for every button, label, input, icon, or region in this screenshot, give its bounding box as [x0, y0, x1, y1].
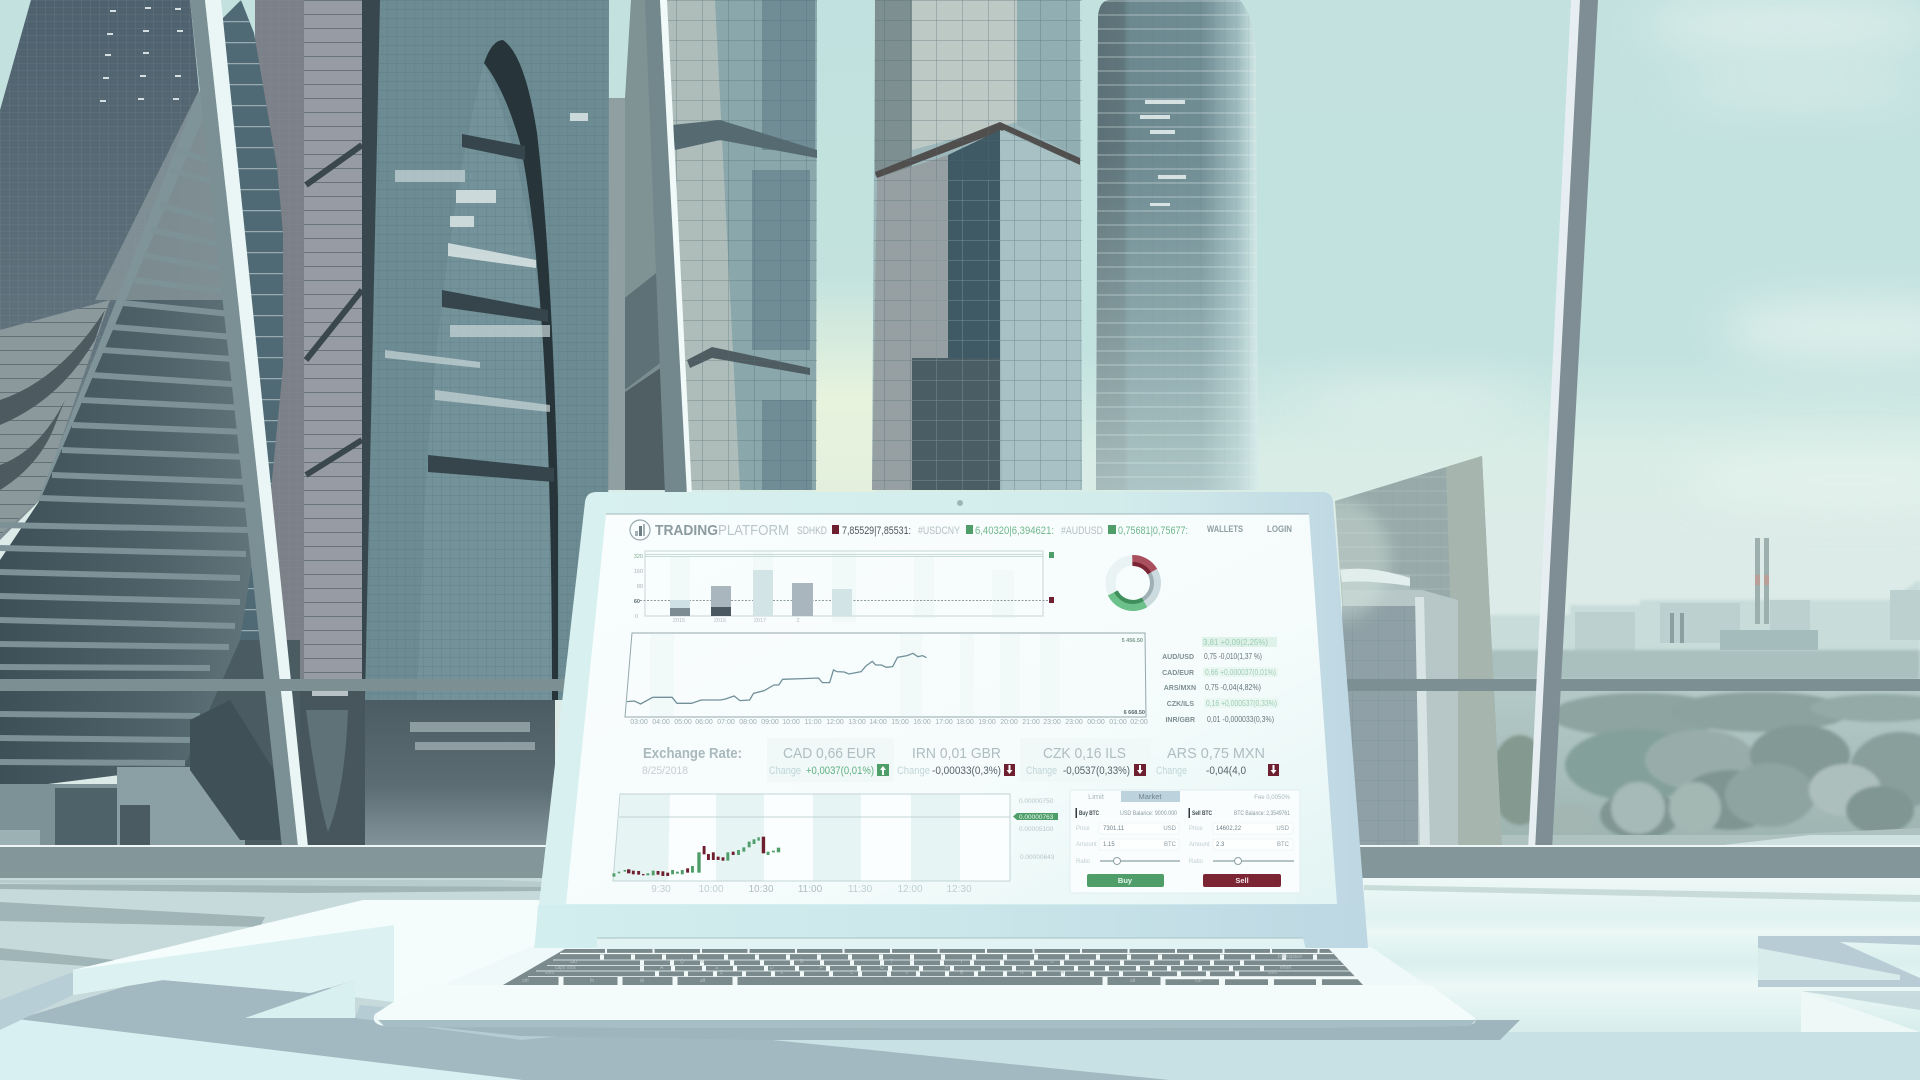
key labels: W	[700, 959, 705, 965]
rates table: 0,75 -0,04(4,82%)	[1205, 683, 1261, 692]
rates table: 3,81 +0,09(2,25%)	[1203, 638, 1268, 647]
price labels	[1122, 638, 1145, 716]
key labels: enter	[1280, 965, 1292, 971]
frame: middle strut	[645, 0, 692, 495]
price scale: 0.00000750	[1019, 798, 1054, 805]
price scale: 0.00000763	[1019, 814, 1054, 821]
key labels: shift	[545, 970, 555, 976]
change labels: Change	[769, 765, 801, 777]
bars	[670, 570, 852, 616]
building: violet-grey facade	[221, 0, 380, 690]
icon: webcam	[957, 500, 963, 506]
exchange rate strip	[642, 738, 1279, 782]
buy form: Price	[1076, 826, 1090, 832]
markers	[1049, 552, 1054, 603]
time axis: 23:00	[1065, 719, 1083, 726]
rates table: CAD/EUR	[1162, 670, 1194, 677]
nav links	[1207, 524, 1292, 534]
building: twisted tower wedge stripes	[0, 90, 300, 847]
sell form: Sell BTC	[1192, 811, 1213, 817]
key labels: ⊞	[640, 978, 644, 984]
keyboard	[503, 949, 1363, 985]
time axis: 11:00	[804, 719, 822, 726]
key labels: R	[800, 959, 804, 965]
candles	[612, 837, 780, 877]
time axis: 05:00	[674, 719, 692, 726]
ticker: SDHKD	[797, 525, 827, 537]
time axis: 03:00	[630, 719, 648, 726]
change values: +0,0037(0,01%)	[806, 765, 874, 777]
key labels: Q	[680, 959, 684, 965]
y axis labels: 80	[637, 584, 643, 590]
donut chart	[1110, 560, 1156, 606]
price labels: 5 456.50	[1122, 638, 1143, 644]
dashboard header: PLATFORM	[718, 522, 789, 539]
tabs: Fee 0,0050%	[1254, 795, 1291, 801]
key labels: D	[770, 965, 774, 971]
time axis	[630, 719, 1148, 726]
building: round glass tower	[1096, 0, 1258, 490]
time axis: 02:00	[1130, 719, 1148, 726]
price scale: 0.00000643	[1020, 854, 1055, 861]
time axis: 11:30	[848, 884, 873, 895]
key labels: H	[945, 965, 949, 971]
pair values: CZK 0,16 ILS	[1043, 745, 1126, 762]
buy form: BTC	[1164, 842, 1177, 848]
buy form: 1.15	[1103, 842, 1115, 848]
time axis: 12:00	[897, 884, 923, 895]
ticker: 6,40320|6,394621:	[975, 525, 1054, 537]
rates table: 0,66 +0,000037(0,01%)	[1205, 668, 1276, 677]
nav links: WALLETS	[1207, 524, 1243, 534]
time axis	[651, 884, 972, 895]
laptop	[374, 492, 1476, 1028]
exchange heading: Exchange Rate:	[643, 745, 742, 762]
time axis: 08:00	[739, 719, 757, 726]
sell form: Amount	[1189, 842, 1210, 848]
key labels: F	[820, 965, 823, 971]
key labels: V	[905, 970, 909, 976]
background: distant city	[1490, 538, 1920, 680]
tabs: Limit	[1088, 792, 1105, 801]
nav links: LOGIN	[1267, 524, 1292, 534]
pair values	[783, 745, 1265, 762]
price line	[627, 653, 927, 704]
x axis labels: 2015	[673, 618, 685, 624]
ticker	[797, 525, 1188, 537]
key labels: fn	[590, 978, 594, 984]
time axis: 9:30	[651, 884, 671, 895]
change labels	[769, 765, 1187, 777]
time axis: 13:00	[848, 719, 866, 726]
building: right slab tower	[1290, 456, 1502, 848]
pair values: IRN 0,01 GBR	[912, 745, 1001, 762]
time axis: 11:00	[798, 884, 823, 895]
time axis: 23:00	[1043, 719, 1061, 726]
price scale: 0.00005100	[1019, 826, 1054, 833]
arch dark	[484, 40, 558, 700]
time axis: 15:00	[891, 719, 909, 726]
buy form	[1076, 808, 1180, 865]
rates table: 0,16 +0,000537(0,33%)	[1206, 699, 1277, 708]
frame: window sill	[0, 845, 1920, 879]
buy button	[1087, 874, 1164, 887]
key labels: alt	[1130, 978, 1136, 984]
sell button: Sell	[1235, 876, 1249, 885]
key labels: ctrl	[1195, 978, 1202, 984]
key labels	[522, 954, 1302, 984]
key labels: tab	[570, 959, 577, 965]
key labels: Z	[720, 970, 723, 976]
time axis: 12:00	[826, 719, 844, 726]
buy form: 7301.11	[1103, 826, 1125, 832]
building: lower dark facades	[285, 688, 370, 848]
sell form: 14602.22	[1216, 826, 1242, 832]
rates table: 0,01 -0,000033(0,3%)	[1207, 715, 1274, 724]
x axis labels: 2016	[714, 618, 726, 624]
building: big teal tower with arch	[365, 0, 609, 845]
rates table: AUD/USD	[1162, 654, 1194, 661]
ticker: 7,85529|7,85531:	[842, 525, 911, 537]
sell form: USD	[1276, 826, 1290, 832]
change values: -0,00033(0,3%)	[932, 765, 1001, 777]
buy form: Amount	[1076, 842, 1097, 848]
x axis labels: 2	[796, 618, 800, 624]
change labels: Change	[1026, 765, 1057, 777]
key labels: T	[890, 959, 893, 965]
y axis labels: 0	[635, 614, 638, 620]
sell button	[1203, 874, 1281, 887]
time axis: 21:00	[1022, 719, 1040, 726]
time axis: 04:00	[652, 719, 670, 726]
bar chart	[634, 551, 1054, 624]
frame: left strut	[190, 0, 308, 847]
x axis labels: 2017	[754, 618, 766, 624]
key labels: A	[660, 965, 664, 971]
trees and river	[1490, 690, 1920, 850]
buy form: Ratio	[1076, 859, 1091, 865]
y axis labels	[634, 554, 643, 620]
frame: right strut	[1528, 0, 1598, 850]
price labels: 6 668.50	[1124, 710, 1145, 716]
rates table: ARS/MXN	[1164, 685, 1196, 692]
date: 8/25/2018	[642, 765, 688, 777]
tabs: Market	[1139, 792, 1162, 801]
candlestick chart	[612, 794, 1058, 895]
time axis: 06:00	[695, 719, 713, 726]
building: twisted tower upper	[0, 0, 199, 540]
time axis: 17:00	[935, 719, 953, 726]
ticker: #AUDUSD	[1061, 525, 1103, 537]
key labels: U	[1050, 959, 1054, 965]
sell form	[1188, 808, 1294, 865]
laptop screen	[566, 514, 1337, 904]
glass table corner	[73, 900, 600, 1018]
time axis: 01:00	[1109, 719, 1127, 726]
icon: logo	[630, 520, 650, 540]
time axis: 10:00	[782, 719, 800, 726]
y axis labels: 60	[634, 599, 640, 605]
rates table: INR/GBR	[1165, 717, 1195, 724]
price scale	[1013, 798, 1058, 861]
ticker: #USDCNY	[918, 525, 961, 537]
key labels: backspace	[1278, 954, 1302, 960]
frame: horizontal mullion	[0, 679, 1920, 691]
time axis: 10:00	[698, 884, 724, 895]
building: tower B	[872, 0, 1082, 490]
rates table: 0,75 -0,010(1,37 %)	[1204, 652, 1262, 661]
x axis labels	[673, 618, 800, 624]
buy button: Buy	[1118, 876, 1133, 885]
time axis: 18:00	[956, 719, 974, 726]
sell form: BTC	[1277, 842, 1290, 848]
arrow boxes	[877, 764, 1279, 776]
key labels: B	[960, 970, 964, 976]
key labels: M	[1060, 970, 1064, 976]
sell form: BTC Balance: 2,3549761	[1234, 811, 1291, 817]
buy form: Buy BTC	[1079, 811, 1100, 817]
trade panel	[1070, 790, 1300, 893]
tabs	[1088, 791, 1291, 802]
time axis: 10:30	[748, 884, 774, 895]
logo wordmark: TRADING	[655, 522, 718, 539]
key labels: S	[715, 965, 719, 971]
dashboard header	[630, 520, 1292, 540]
key labels: C	[850, 970, 854, 976]
change labels: Change	[1156, 765, 1187, 777]
time axis: 16:00	[913, 719, 931, 726]
time axis: 19:00	[978, 719, 996, 726]
key labels: ctrl	[522, 978, 529, 984]
change values: -0,0537(0,33%)	[1063, 765, 1130, 777]
key labels: alt	[700, 978, 706, 984]
time axis: 00:00	[1087, 719, 1105, 726]
time axis: 14:00	[869, 719, 887, 726]
rates table: CZK/ILS	[1167, 701, 1194, 708]
time axis: 20:00	[1000, 719, 1018, 726]
key labels: X	[780, 970, 784, 976]
desk surface	[0, 878, 1920, 1080]
key labels: caps lock	[555, 965, 576, 971]
laptop lid bezel	[534, 492, 1368, 950]
time axis: 07:00	[717, 719, 735, 726]
sell form: Price	[1189, 826, 1203, 832]
icon: tall chimneys	[1755, 538, 1769, 624]
pair values: CAD 0,66 EUR	[783, 745, 876, 762]
ticker: 0,75681|0,75677:	[1118, 525, 1188, 537]
time axis: 12:30	[946, 884, 972, 895]
y axis labels: 160	[634, 569, 643, 575]
building: mid-left facades behind strut	[605, 0, 690, 490]
laptop base	[374, 947, 1476, 1028]
buy form: USD	[1163, 826, 1177, 832]
change values: -0,04(4,0	[1206, 765, 1246, 777]
change labels: Change	[897, 765, 930, 777]
time axis: 09:00	[761, 719, 779, 726]
key labels: Y	[960, 959, 964, 965]
line chart	[625, 633, 1148, 726]
key labels: shift	[1268, 970, 1278, 976]
change values	[806, 765, 1246, 777]
buy form: USD Balance: 9000.000	[1120, 811, 1178, 817]
sell form: 2.3	[1216, 842, 1225, 848]
sell form: Ratio	[1189, 859, 1204, 865]
key labels: N	[1020, 970, 1024, 976]
key labels: G	[880, 965, 884, 971]
desk shadows	[0, 972, 1920, 1080]
y axis labels: 320	[634, 554, 643, 560]
building: tower A	[667, 0, 817, 490]
pair values: ARS 0,75 MXN	[1167, 745, 1265, 762]
rates table	[1162, 637, 1279, 724]
